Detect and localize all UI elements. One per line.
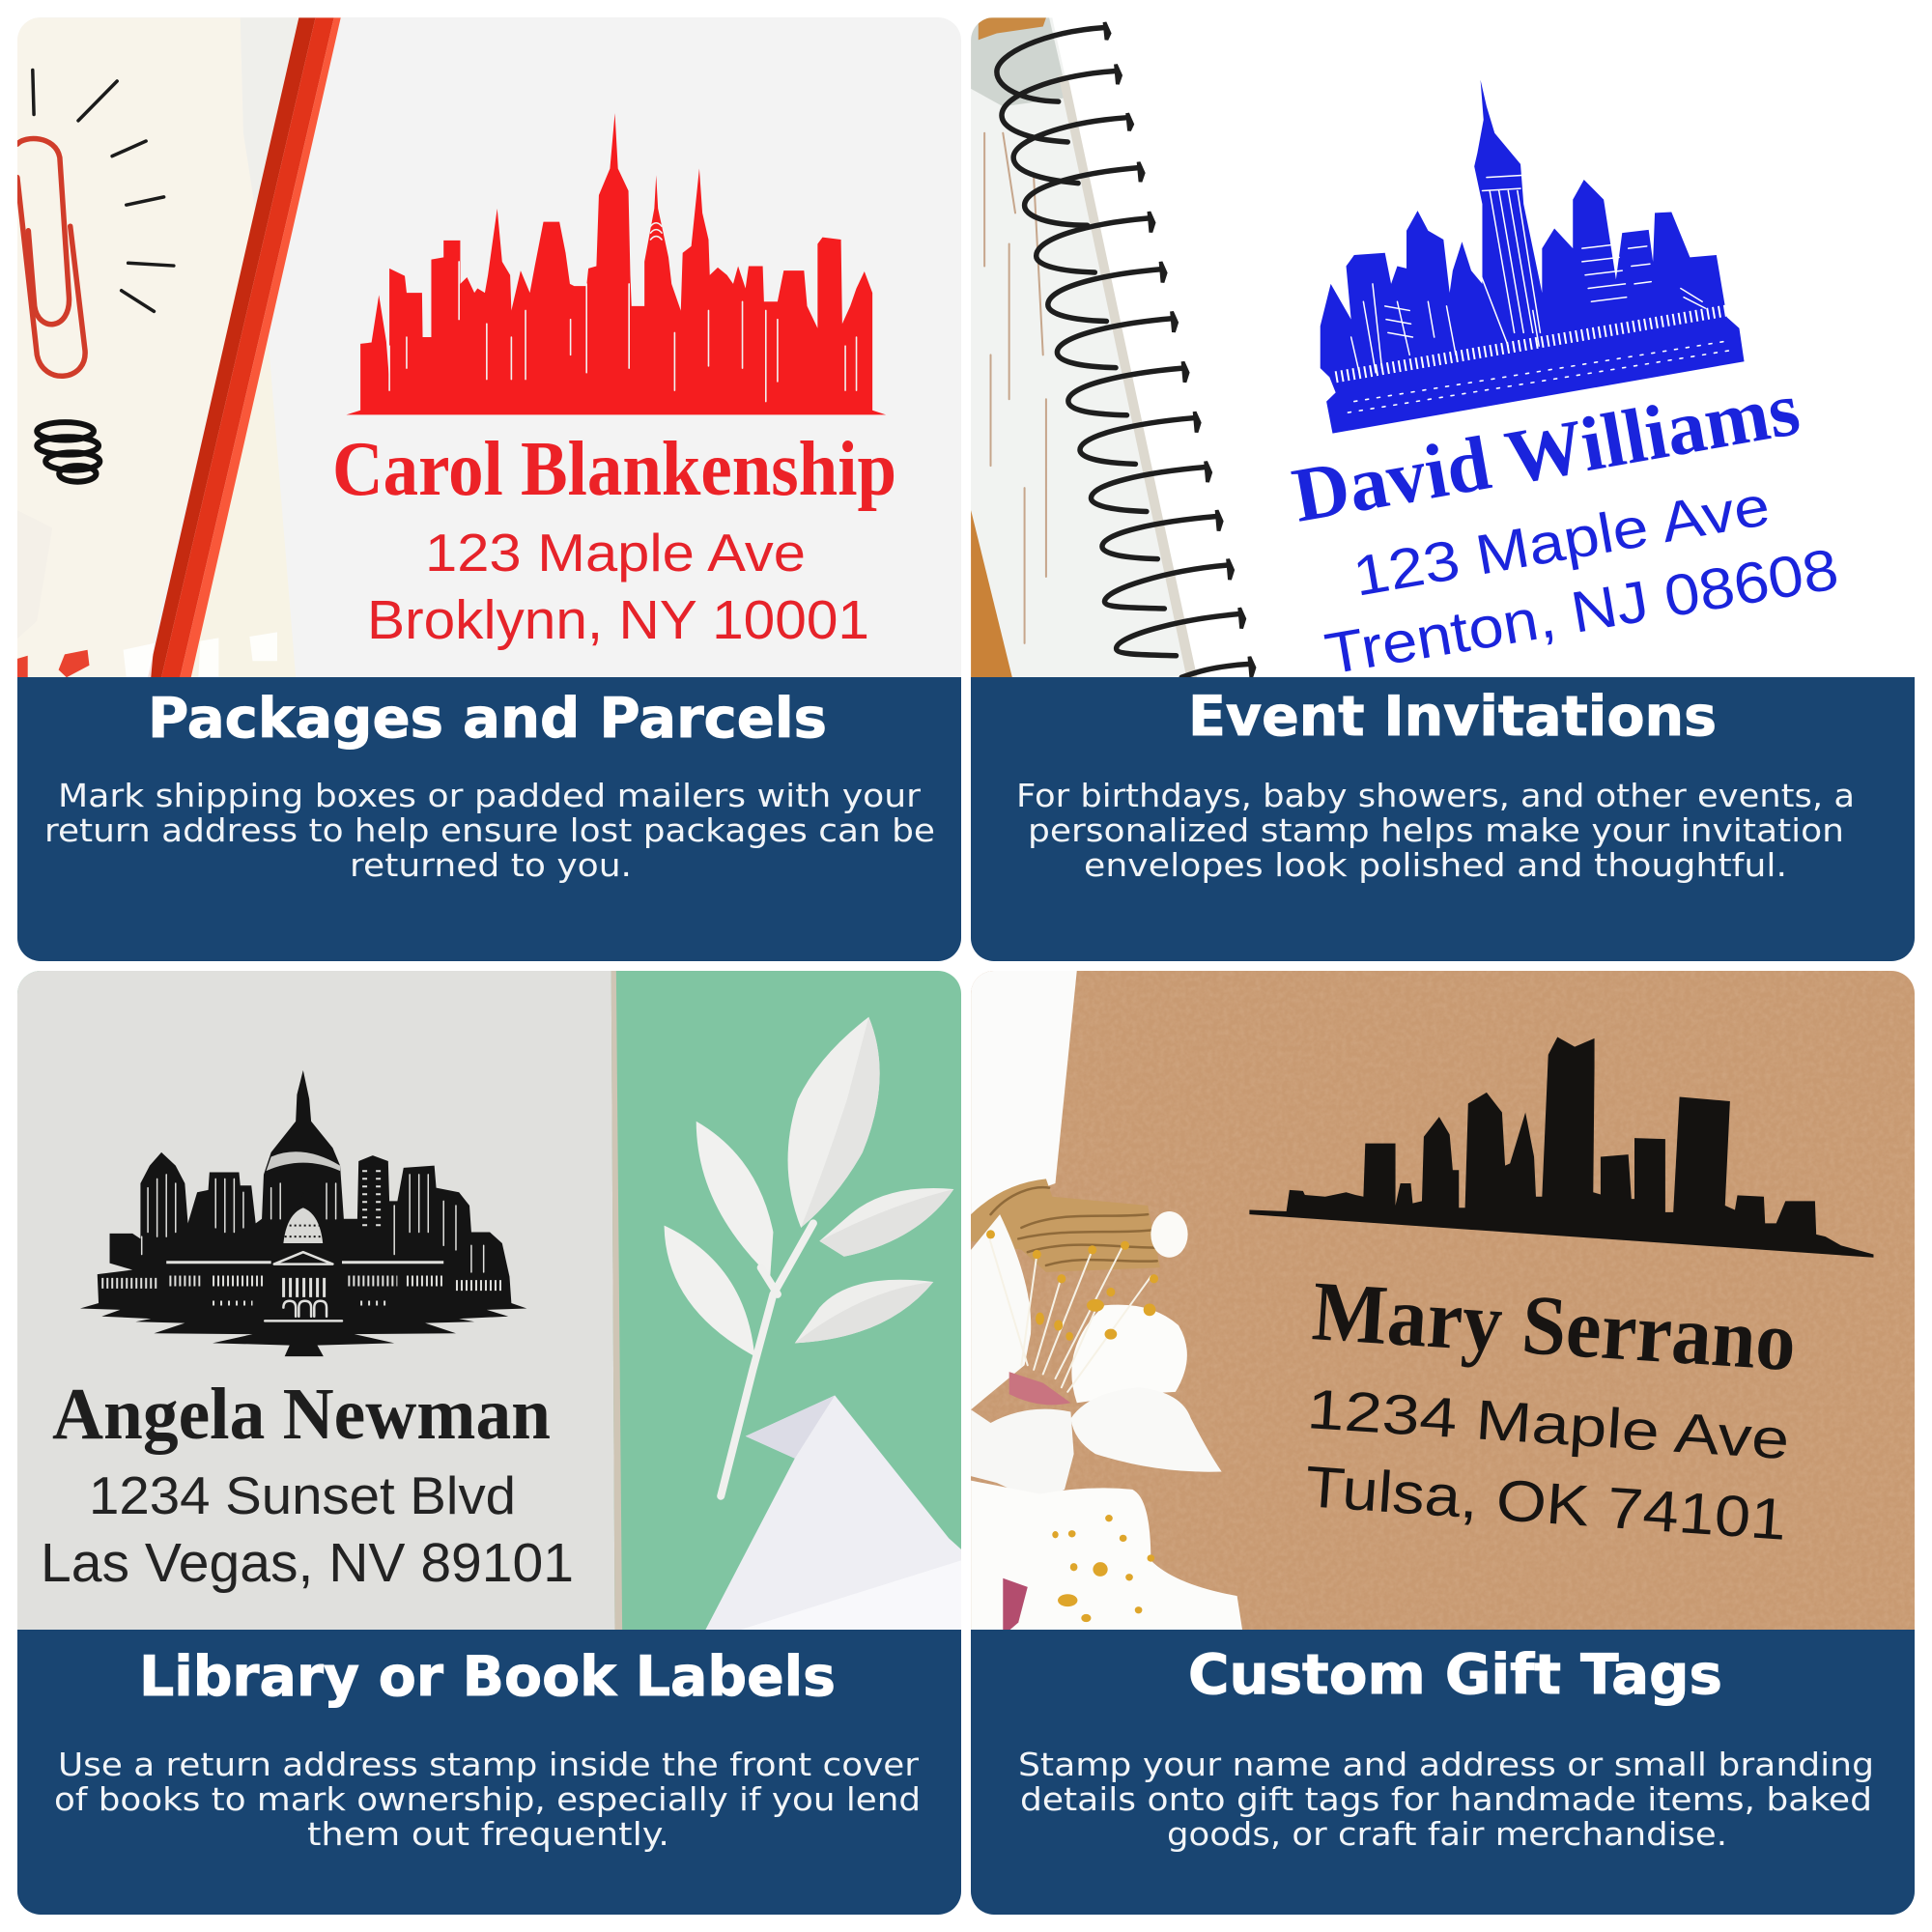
stamp street: 123 Maple Ave	[1349, 474, 1775, 609]
icon: origami paper	[702, 1396, 974, 1635]
description	[1018, 1746, 1874, 1853]
description: them out frequently.	[307, 1815, 669, 1853]
black city skyline stamp	[80, 1070, 526, 1356]
stamp city: Trenton, NJ 08608	[1321, 536, 1843, 687]
icon: twine knot	[971, 1179, 1160, 1272]
description: details onto gift tags for handmade items, baked	[1020, 1780, 1872, 1818]
description: of books to mark ownership, especially if you lend	[54, 1780, 921, 1818]
stamp city: Tulsa, OK 74101	[1303, 1454, 1789, 1552]
caption band	[971, 1630, 1915, 1915]
heading: Library or Book Labels	[139, 1645, 836, 1709]
description: For birthdays, baby showers, and other events, a	[1016, 777, 1855, 814]
stamp street: 123 Maple Ave	[425, 523, 806, 582]
description: return address to help ensure lost packages can be	[44, 811, 935, 849]
heading: Custom Gift Tags	[1188, 1643, 1722, 1707]
description: goods, or craft fair merchandise.	[1167, 1815, 1727, 1853]
icon: spiral binding	[997, 27, 1249, 677]
stamp city: Broklynn, NY 10001	[367, 589, 869, 651]
description	[1016, 777, 1855, 884]
heading: Event Invitations	[1188, 685, 1717, 749]
description: returned to you.	[350, 846, 632, 884]
description	[54, 1746, 921, 1853]
stamp street: 1234 Maple Ave	[1305, 1378, 1791, 1471]
icon: paper leaf sprig	[665, 1017, 953, 1496]
panel: Packages and Parcels	[17, 17, 961, 961]
icon: sketched bulb base	[37, 422, 99, 482]
photo: red stamp on white paper with pencil and paperclip	[17, 17, 961, 684]
stamp street: 1234 Sunset Blvd	[89, 1465, 516, 1525]
caption band	[17, 677, 961, 961]
red city skyline stamp	[346, 113, 886, 414]
icon: red paperclip	[17, 139, 85, 376]
stamp name: David Williams	[1287, 366, 1805, 539]
stamp city: Las Vegas, NV 89101	[41, 1532, 574, 1594]
description: personalized stamp helps make your invitation	[1028, 811, 1844, 849]
blue city skyline stamp	[1321, 80, 1745, 434]
description: Stamp your name and address or small branding	[1018, 1746, 1874, 1783]
description	[44, 777, 935, 884]
panel: Library or Book Labels	[17, 966, 974, 1915]
heading: Packages and Parcels	[148, 687, 827, 751]
panel: Custom Gift Tags	[971, 971, 1915, 1915]
description: Mark shipping boxes or padded mailers with your	[58, 777, 921, 814]
black city skyline stamp	[1249, 1037, 1873, 1258]
description: envelopes look polished and thoughtful.	[1084, 846, 1787, 884]
stamp name: Carol Blankenship	[332, 427, 896, 512]
icon: sketched light rays	[33, 71, 174, 311]
icon: blossom flowers	[971, 1214, 1243, 1635]
stamp name: Angela Newman	[52, 1374, 551, 1455]
panel: Event Invitations	[971, 17, 1915, 961]
photo: black stamp on kraft tag with blossoms	[971, 971, 1915, 1637]
caption band	[17, 1630, 961, 1915]
stamp name: Mary Serrano	[1310, 1264, 1799, 1389]
photo: blue stamp on spiral notebook	[971, 17, 1915, 687]
photo: black stamp on grey card beside paper leaves	[17, 966, 974, 1637]
caption band	[971, 677, 1915, 961]
description: Use a return address stamp inside the front cover	[58, 1746, 919, 1783]
